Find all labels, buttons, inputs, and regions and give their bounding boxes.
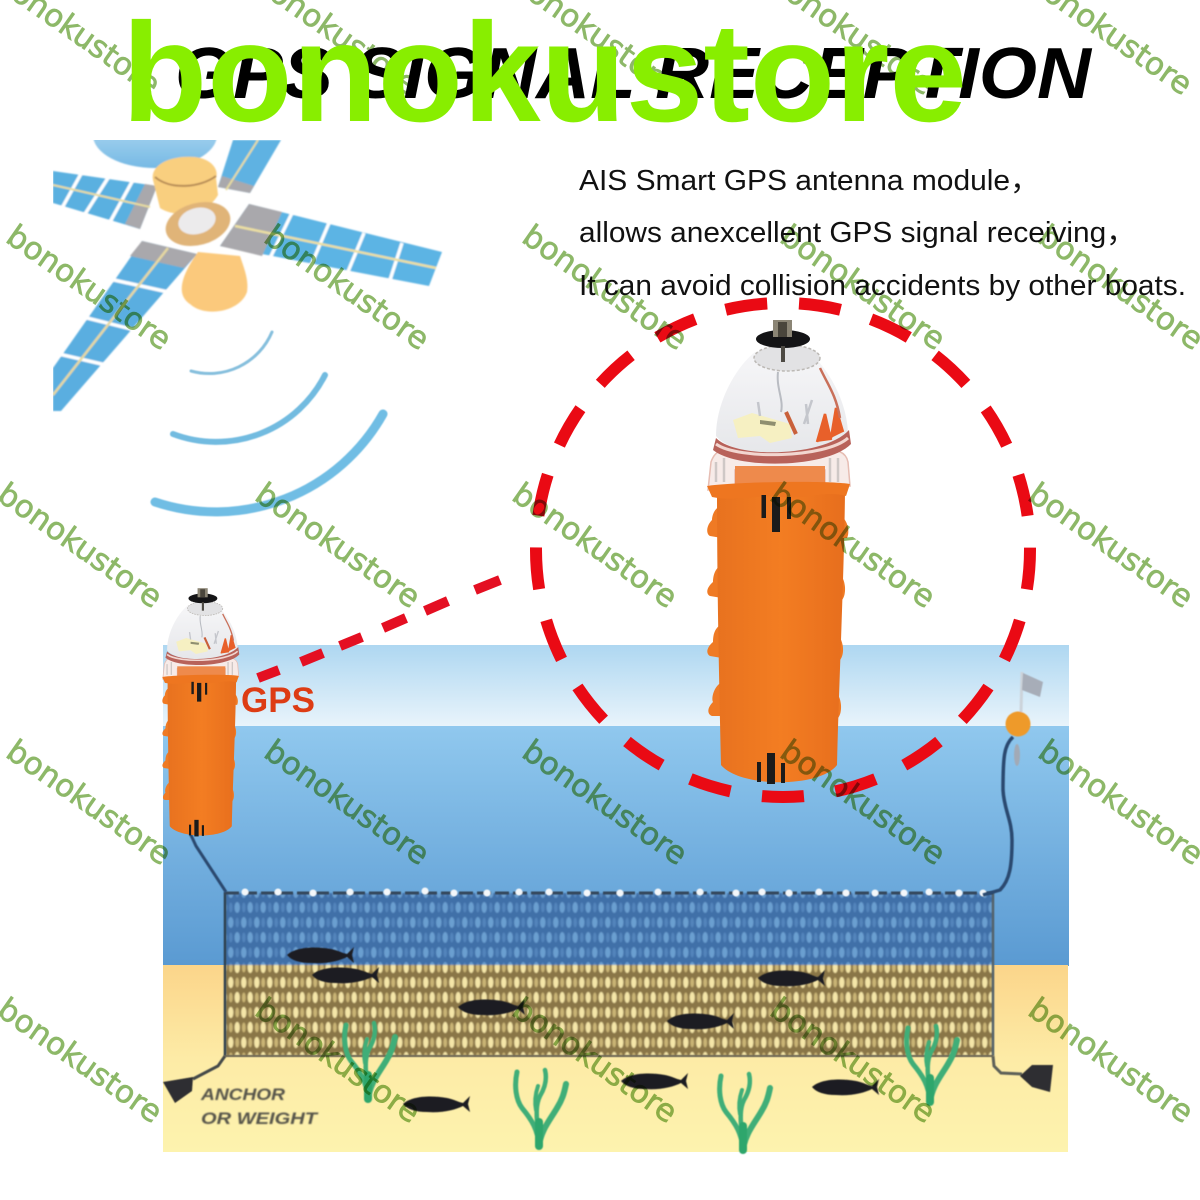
- seabed sand: [163, 965, 1068, 1152]
- lower left solar panel: [50, 241, 197, 411]
- fishing net: [225, 888, 993, 1056]
- right anchor and rope: [993, 1056, 1053, 1092]
- watermarks: bonokustore: [764, 991, 942, 1131]
- left anchor and rope: [163, 1056, 225, 1103]
- satellite ring and sensor: [164, 202, 232, 247]
- watermarks: bonokustore: [506, 476, 684, 616]
- water: [163, 726, 1069, 966]
- sky band: [163, 645, 1069, 727]
- watermarks: bonokustore: [1022, 991, 1200, 1131]
- watermarks: bonokustore: [0, 218, 178, 358]
- watermarks: bonokustore: [516, 218, 694, 358]
- ocean scene: [163, 645, 1069, 1152]
- net floats: [242, 888, 986, 896]
- satellite upper body: [153, 157, 218, 214]
- callout: dashed zoom circle: [536, 303, 1030, 797]
- watermarks: bonokustore: [249, 991, 427, 1131]
- description text: AIS Smart GPS antenna module，: [579, 165, 1040, 197]
- watermarks: bonokustore: [516, 733, 694, 873]
- description text: allows anexcellent GPS signal receiving，: [579, 217, 1136, 249]
- satellite lower body: [182, 252, 247, 312]
- signal waves: [155, 332, 383, 512]
- watermarks: bonokustore: [258, 218, 436, 358]
- watermarks: bonokustore: [506, 991, 684, 1131]
- anchor label: [200, 1085, 319, 1128]
- watermarks: bonokustore: [774, 218, 952, 358]
- description text: It can avoid collision accidents by other boats.: [579, 270, 1186, 302]
- satellite illustration: [53, 140, 443, 412]
- title: GPS signal reception: GPS SIGNAL RECEPTION: [175, 34, 1093, 114]
- description text: [579, 165, 1186, 302]
- fish: [287, 947, 879, 1112]
- large GPS buoy: [707, 320, 851, 784]
- anchor label: ANCHOR: [200, 1085, 286, 1104]
- watermarks: bonokustore: [249, 476, 427, 616]
- small GPS buoy: [162, 588, 239, 836]
- callout: dashed leader line: [258, 580, 500, 678]
- watermarks: bonokustore: [0, 733, 178, 873]
- anchor label: OR WEIGHT: [201, 1109, 319, 1128]
- GPS label: GPS: [241, 681, 315, 720]
- watermarks: bonokustore: [764, 476, 942, 616]
- upper left solar panel: [53, 171, 157, 229]
- seaweed: [345, 1023, 957, 1150]
- watermarks: bonokustore: [1022, 476, 1200, 616]
- right solar panel: [220, 204, 442, 286]
- satellite dish: [93, 140, 217, 169]
- watermarks: bonokustore: [774, 733, 952, 873]
- marker buoy with flag: [190, 672, 1043, 895]
- watermarks: bonokustore: [258, 733, 436, 873]
- upper right solar panel: [218, 140, 281, 193]
